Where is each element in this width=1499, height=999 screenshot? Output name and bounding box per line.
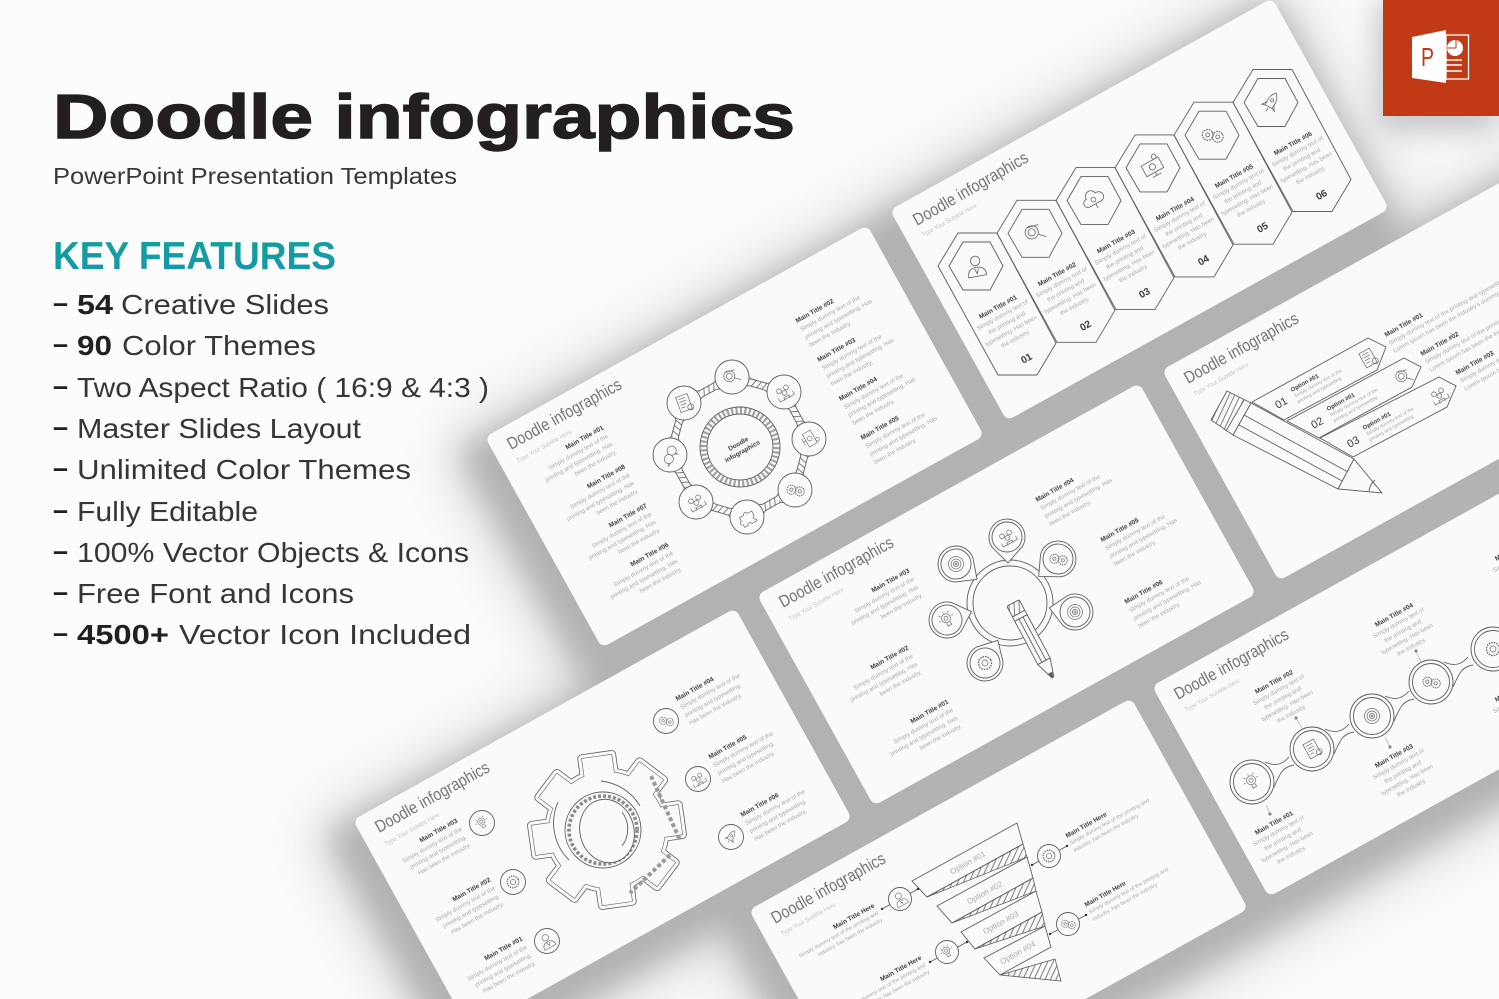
text block: left top	[794, 902, 884, 966]
text block: left bottom: Main Title Here	[879, 954, 923, 983]
text block: title 02: printing and typesetting.	[442, 894, 501, 930]
text block: title 07: Main Title #07	[608, 502, 649, 529]
text block: title 06	[740, 780, 816, 843]
text block: title 01: Main Title #01	[1384, 312, 1424, 339]
text block: title 01: Simply dummy text of the	[467, 944, 529, 983]
hexagon step 05: Simply dummy text of	[1212, 168, 1266, 201]
text block: title 02: Simply dummy text of the	[800, 295, 862, 333]
text block: title 07: Simply dummy text of the	[591, 511, 654, 550]
text block: title 01: Main Title #01	[483, 935, 524, 962]
hexagon step 02: the industry.	[1059, 296, 1091, 317]
feature list: Free Font and Icons	[77, 578, 354, 609]
feature list: –	[53, 287, 68, 318]
text block: title 06: printing and typesetting.	[749, 799, 808, 835]
map pins	[924, 518, 1096, 687]
text block: title 02: Simply dummy text of the	[435, 885, 497, 924]
text block: title 02	[795, 282, 878, 349]
arrow tags: Option #01	[1326, 392, 1357, 413]
text block: title 05	[1100, 501, 1183, 568]
arrow tags: Option #01	[1290, 373, 1321, 394]
text block: title 03: been the industry.	[830, 359, 875, 388]
panel: funnel slide: Doodle infographics	[768, 849, 889, 927]
text block: right top: Main Title Here	[1065, 811, 1109, 840]
text block: title 04: Main Title #04	[1035, 477, 1075, 504]
ring diagram	[653, 360, 826, 534]
text block: title 02	[1247, 665, 1319, 731]
hexagon step 04: typesetting. Has been	[1162, 217, 1215, 250]
icon circles	[470, 708, 744, 954]
text block: title 08: printing and typesetting. Has	[566, 481, 636, 523]
ring centre label	[720, 432, 762, 464]
feature list: –	[53, 370, 68, 401]
text block: title 06: been the industry.	[639, 566, 684, 595]
hexagon step 03: Simply dummy text of	[1094, 234, 1148, 267]
text block: title 04: Simply dummy text of the	[1040, 474, 1102, 512]
hexagon step 06: typesetting. Has been	[1280, 151, 1333, 185]
icon: large pencil	[1211, 391, 1382, 493]
text block: right top: Simply dummy text of the printing and	[1069, 798, 1151, 847]
text block: title 05: printing and typesetting. Has	[869, 416, 939, 458]
arrow tags: Simply dummy text of the	[1365, 406, 1416, 437]
funnel chart	[912, 823, 1061, 981]
feature list: –	[53, 535, 68, 566]
text block: title 03: Simply dummy text of	[1372, 748, 1426, 781]
text block: title 07: printing and typesetting. Has	[588, 520, 657, 562]
arrow tags: printing and typesetting	[1296, 376, 1343, 405]
text block: title 05	[708, 722, 784, 785]
text block: title 03: Simply dummy text of the	[402, 826, 464, 865]
text block: title 06	[600, 541, 684, 609]
text block: title 03: the industry.	[1396, 778, 1428, 799]
arrow tags: 03	[1345, 434, 1362, 451]
title: Doodle infographics	[53, 83, 795, 152]
hexagon step 06	[1233, 70, 1351, 214]
text block: title 02: Has been the industry.	[450, 901, 506, 936]
text block: title 04	[675, 664, 751, 727]
text block: title 04: Simply dummy text of the	[843, 373, 905, 411]
text block: title 08: Simply dummy text of the	[569, 472, 632, 511]
text block: title 05: Simply dummy text of the	[713, 731, 775, 769]
text block: title 01: been the industry.	[574, 449, 619, 478]
feature list: Color Themes	[122, 330, 316, 361]
text block: title 05: printing and typesetting. Has	[1109, 518, 1178, 560]
text block: right bottom: Simply dummy text of the printing and	[1088, 867, 1170, 916]
text block: title 04: the printing and	[1384, 619, 1423, 644]
hexagon step 04: the industry.	[1177, 231, 1209, 252]
text block: title 02: the industry.	[1276, 704, 1308, 725]
hexagon step 05	[1174, 102, 1292, 247]
hexagon step 04: the printing and	[1165, 213, 1204, 238]
text block: title 04: been the industry.	[1048, 499, 1093, 528]
text block: left top: Simply dummy text of the printing and	[798, 910, 880, 959]
text block: title 02: Simply dummy text of	[1252, 674, 1306, 707]
ring centre label: infographics	[724, 439, 762, 464]
text block: title 04	[1367, 598, 1439, 664]
text block: title 06: Main Title #06	[1124, 579, 1164, 606]
hexagon step 03: 03	[1137, 286, 1153, 301]
panel: timeline slide	[1152, 474, 1499, 897]
hexagon step 01: 01	[1019, 351, 1035, 367]
panel: gear slide: Type Your Subtitle Here	[384, 811, 442, 848]
hexagon step 04	[1115, 135, 1233, 280]
hexagon step 03: the industry.	[1118, 263, 1150, 284]
connectors and icon circles	[881, 844, 1087, 964]
feature list: –	[53, 617, 68, 648]
feature list: –	[53, 576, 68, 607]
arrow tags: Simply dummy text of the	[1329, 387, 1380, 418]
text block: title 02: typesetting. Has been	[1261, 690, 1314, 723]
text block: title 03: been the industry.	[880, 592, 925, 621]
arrow tags: Simply dummy text of the	[1293, 368, 1344, 399]
hexagon step 02: Main Title #02	[1037, 261, 1078, 288]
text block: title 01: Main Title #01	[1254, 810, 1295, 837]
text block: title 06: been the industry.	[1137, 601, 1182, 630]
text block: title 02: Main Title #02	[451, 876, 492, 903]
panel: ring slide	[485, 225, 984, 648]
text block: title 03: Main Title #03	[1374, 743, 1415, 770]
panel: ring slide: Doodle infographics	[504, 375, 625, 453]
text block: title 06: Has been the industry.	[753, 809, 809, 843]
arrow tags	[1252, 338, 1456, 457]
hexagon step 06: 06	[1314, 188, 1330, 203]
ring centre label: Doodle	[727, 436, 750, 453]
text block: title 01: printing and typesetting. Has	[545, 442, 614, 484]
hexagon step 06: Main Title #06	[1273, 130, 1314, 157]
feature list: –	[53, 328, 68, 359]
text block: title 01: the industry.	[1276, 845, 1308, 866]
text block: title 01	[1247, 806, 1319, 872]
feature list: Fully Editable	[77, 496, 258, 527]
panel: gear slide	[353, 608, 852, 999]
text block: title 05: Main Title #05	[708, 734, 748, 761]
arrow tags: printing and typesetting	[1368, 414, 1415, 443]
hexagon step 02: 02	[1078, 319, 1094, 334]
text block: title 01: Main Title #01	[909, 698, 950, 725]
text block: title 01	[535, 424, 619, 492]
feature list	[53, 287, 489, 650]
text block: title 02: Main Title #02	[869, 644, 910, 671]
text block: title 04	[838, 360, 921, 427]
text block: title 04: Simply dummy text of the	[680, 673, 742, 711]
text block: title 05: been the industry.	[1113, 539, 1158, 568]
text block: title 06: Main Title #06	[740, 792, 780, 819]
panel: timeline slide: Type Your Subtitle Here	[1184, 677, 1242, 714]
text block: title 04: Simply dummy text of	[1372, 607, 1426, 640]
feature list: Vector Icon Included	[179, 619, 471, 650]
hexagon step 02	[997, 200, 1115, 345]
text block: title 02: Main Title #02	[1254, 669, 1295, 696]
text block: title 03: typesetting. Has been	[1381, 764, 1434, 797]
hexagon step 02: Simply dummy text of	[1035, 266, 1089, 300]
text block: title 01: Main Title #01	[564, 424, 605, 451]
text block: right bottom: Main Title Here	[1084, 880, 1128, 909]
hexagon step 05: typesetting. Has been	[1221, 184, 1274, 217]
text block: title 01: Simply dummy text of	[1252, 815, 1306, 848]
text block: title 03: Main Title #03	[1455, 350, 1495, 377]
text block: title 03: Main Title #03	[816, 337, 857, 364]
hexagon step 03: Main Title #03	[1096, 228, 1137, 255]
text block: title 05: Main Title #05	[1100, 517, 1140, 544]
text block: title 03: printing and typesetting.	[409, 835, 468, 871]
text block: title 05: been the industry.	[873, 437, 918, 466]
text block: title 06: Simply dummy text of the	[1129, 576, 1191, 614]
text block: right bottom	[1084, 859, 1174, 923]
hexagon step 06: the industry.	[1295, 165, 1327, 186]
panel: ring slide: Type Your Subtitle Here	[516, 428, 574, 465]
panel: funnel slide	[749, 698, 1248, 999]
text block: title 04: been the industry.	[852, 398, 896, 427]
text block: title 01: Simply dummy text of the	[893, 707, 955, 746]
text block: title 03	[1367, 739, 1439, 805]
text block: title 01: typesetting. Has been	[1261, 831, 1314, 864]
hexagon step 01	[938, 233, 1056, 378]
panel: pencil and pins slide: Type Your Subtitle Here	[788, 586, 846, 623]
funnel chart: Option #04	[998, 939, 1038, 966]
panel: pencil options slide: Type Your Subtitle Here	[1193, 361, 1251, 398]
hexagon step 03: typesetting. Has been	[1103, 249, 1156, 283]
hexagon step 03	[1056, 168, 1174, 313]
text block: title 07: been the industry.	[617, 527, 662, 556]
hexagon step 01: typesetting. Has been	[985, 315, 1038, 348]
feature list: –	[53, 494, 68, 525]
arrow tags: 02	[1309, 415, 1326, 432]
icon: PowerPoint tile: P	[1421, 42, 1434, 72]
feature list: Master Slides Layout	[77, 413, 361, 444]
text block: title 05: Simply dummy text of the	[1105, 514, 1167, 552]
panel: pencil and pins slide: Doodle infographics	[776, 533, 897, 611]
text block: title 07	[578, 502, 662, 570]
text block: title 06: Simply dummy text of the	[745, 789, 807, 827]
text block: title 03: Has been the industry.	[417, 842, 473, 877]
text block: title 02	[430, 876, 506, 939]
panel: funnel slide: Type Your Subtitle Here	[780, 901, 838, 938]
feature list: Creative Slides	[121, 289, 329, 320]
text block: title 03	[841, 567, 925, 635]
panel: pencil options slide: Doodle infographics	[1181, 309, 1302, 387]
text block: title 08: been the industry.	[596, 488, 640, 517]
feature list: –	[53, 452, 68, 483]
text block: title 04: typesetting. Has been	[1381, 623, 1434, 656]
text block: title 03: printing and typesetting. Has	[851, 585, 920, 627]
hexagon step 01: Main Title #01	[978, 294, 1019, 321]
panel: hexagon slide: Type Your Subtitle Here	[921, 202, 979, 239]
hexagon step 05: 05	[1255, 221, 1271, 236]
hexagon step 05: Main Title #05	[1214, 163, 1255, 190]
text block: title 08	[557, 463, 641, 531]
feature list: –	[53, 411, 68, 442]
arrow tags: 01	[1273, 395, 1290, 412]
chain of circles	[1230, 627, 1499, 816]
text block: title 03: Main Title #03	[418, 817, 459, 844]
text block: title 06: Main Title #06	[629, 541, 670, 568]
panel: hexagon slide: Doodle infographics	[910, 148, 1032, 229]
text block: title 01: printing and typesetting.	[474, 953, 533, 989]
feature list: 100% Vector Objects & Icons	[77, 537, 469, 568]
text block: left top: industry. has been the industry	[817, 917, 884, 958]
text block: title 06	[1487, 532, 1499, 582]
feature list: 54	[77, 289, 114, 320]
text block: title 02: Simply dummy text of the	[853, 653, 915, 692]
text block: title 05: printing and typesetting.	[717, 741, 776, 777]
text block: title 03: printing and typesetting. Has	[826, 338, 895, 380]
text block: title 02: Main Title #02	[1420, 331, 1460, 358]
central double circle	[967, 560, 1053, 646]
text block: title 05: Simply dummy text of the	[865, 412, 927, 450]
feature list: Unlimited Color Themes	[77, 454, 411, 485]
hexagon step 02: typesetting. Has been	[1044, 282, 1097, 315]
text block: title 04: Has been the industry.	[688, 693, 744, 727]
text block: title 04: Main Title #04	[1374, 602, 1415, 629]
text block: right top: industry. has been the industry	[1073, 813, 1140, 854]
heading: key features: KEY FEATURES	[53, 235, 336, 278]
text block: title 08: Main Title #08	[586, 463, 627, 490]
text block: right bottom: industry. has been the industry	[1092, 882, 1159, 923]
text block: title 03: Simply dummy text of the	[821, 334, 884, 372]
text block: title 06: Simply dummy text of the	[613, 550, 675, 589]
text block: title 01	[462, 935, 538, 998]
text block: title 01: been the industry.	[919, 723, 964, 752]
panel: pencil and pins slide	[757, 383, 1256, 806]
text block: title 02: printing and typesetting. Has	[850, 662, 919, 704]
text block: title 03: Simply dummy text of the	[854, 576, 916, 615]
text block: title 02: the printing and	[1264, 686, 1303, 711]
funnel chart: Option #01	[948, 849, 988, 876]
feature list: 90	[77, 330, 112, 361]
text block: title 01: the printing and	[1264, 827, 1303, 852]
funnel chart: Option #03	[981, 909, 1021, 936]
text block: title 03	[816, 321, 900, 388]
text block: title 06: printing and typesetting. Has	[1133, 580, 1202, 622]
panel: hexagon slide	[890, 0, 1389, 421]
hexagon step 01: the industry.	[1000, 329, 1032, 350]
text block: title 06: printing and typesetting. Has	[610, 559, 679, 601]
text block: title 01: Simply dummy text of the	[548, 433, 610, 472]
icon: PowerPoint tile	[1383, 0, 1499, 116]
text block: title 04: printing and typesetting. Has	[1044, 478, 1113, 520]
hexagon step 05: the printing and	[1224, 180, 1263, 205]
text block: title 05	[860, 399, 943, 466]
text block: title 01	[880, 698, 964, 766]
text block: right top	[1065, 790, 1155, 854]
hexagon step 04: Main Title #04	[1155, 196, 1196, 223]
text block: title 04: Main Title #04	[675, 676, 715, 703]
feature list: 4500+	[77, 619, 169, 650]
hexagon step 04: Simply dummy text of	[1153, 201, 1207, 234]
text block: title 04: printing and typesetting. Has	[847, 377, 917, 419]
icon: large gear	[523, 746, 691, 914]
text block: title 01: printing and typesetting. Has	[890, 716, 959, 758]
hexagon step 01: Simply dummy text of	[976, 299, 1030, 332]
text block: title 02: Main Title #02	[795, 298, 835, 325]
arrow tags: printing and typesetting	[1332, 395, 1379, 424]
text block: left top: Main Title Here	[832, 902, 876, 931]
funnel chart: Option #02	[965, 879, 1005, 906]
text block: title 06	[1124, 563, 1207, 630]
hexagon step 05: the industry.	[1236, 198, 1268, 219]
hexagon step 01: the printing and	[988, 311, 1027, 336]
text block: title 02: printing and typesetting. Has	[804, 299, 873, 341]
panel: pencil options slide	[1162, 158, 1499, 581]
feature list: Two Aspect Ratio ( 16:9 & 4:3 )	[77, 372, 489, 403]
text block: title 02	[840, 644, 924, 712]
central rope circle	[700, 407, 780, 487]
text block: title 02: been the industry.	[808, 320, 853, 349]
text block: title 04: the industry.	[1396, 637, 1428, 658]
hexagon step 03: the printing and	[1106, 246, 1145, 271]
text block: title 02: been the industry.	[879, 669, 924, 698]
arrow tags: Option #01	[1362, 411, 1393, 432]
text block: title 01: Has been the industry.	[482, 960, 538, 995]
text block: title 05	[1487, 673, 1499, 723]
subtitle: PowerPoint Presentation Templates	[53, 163, 457, 189]
panel: timeline slide: Doodle infographics	[1171, 625, 1292, 703]
hexagon step 04: 04	[1196, 253, 1212, 268]
hexagon step 06: the printing and	[1283, 147, 1322, 173]
hexagon step 06: Simply dummy text of	[1271, 136, 1325, 169]
text block: title 04: Main Title #04	[838, 376, 879, 403]
text block: title 03: Main Title #03	[870, 567, 911, 594]
text block: title 05: Has been the industry.	[721, 751, 777, 785]
icon: pencil	[1007, 600, 1059, 681]
text block: title 04: printing and typesetting.	[684, 683, 743, 719]
text block: title 03	[397, 817, 473, 880]
text block: title 05: Main Title #05	[860, 415, 901, 442]
text block: title 03: the printing and	[1384, 760, 1423, 785]
hexagon step 02: the printing and	[1047, 278, 1086, 304]
panel: gear slide: Doodle infographics	[372, 758, 493, 836]
text block: title 04	[1035, 461, 1118, 528]
